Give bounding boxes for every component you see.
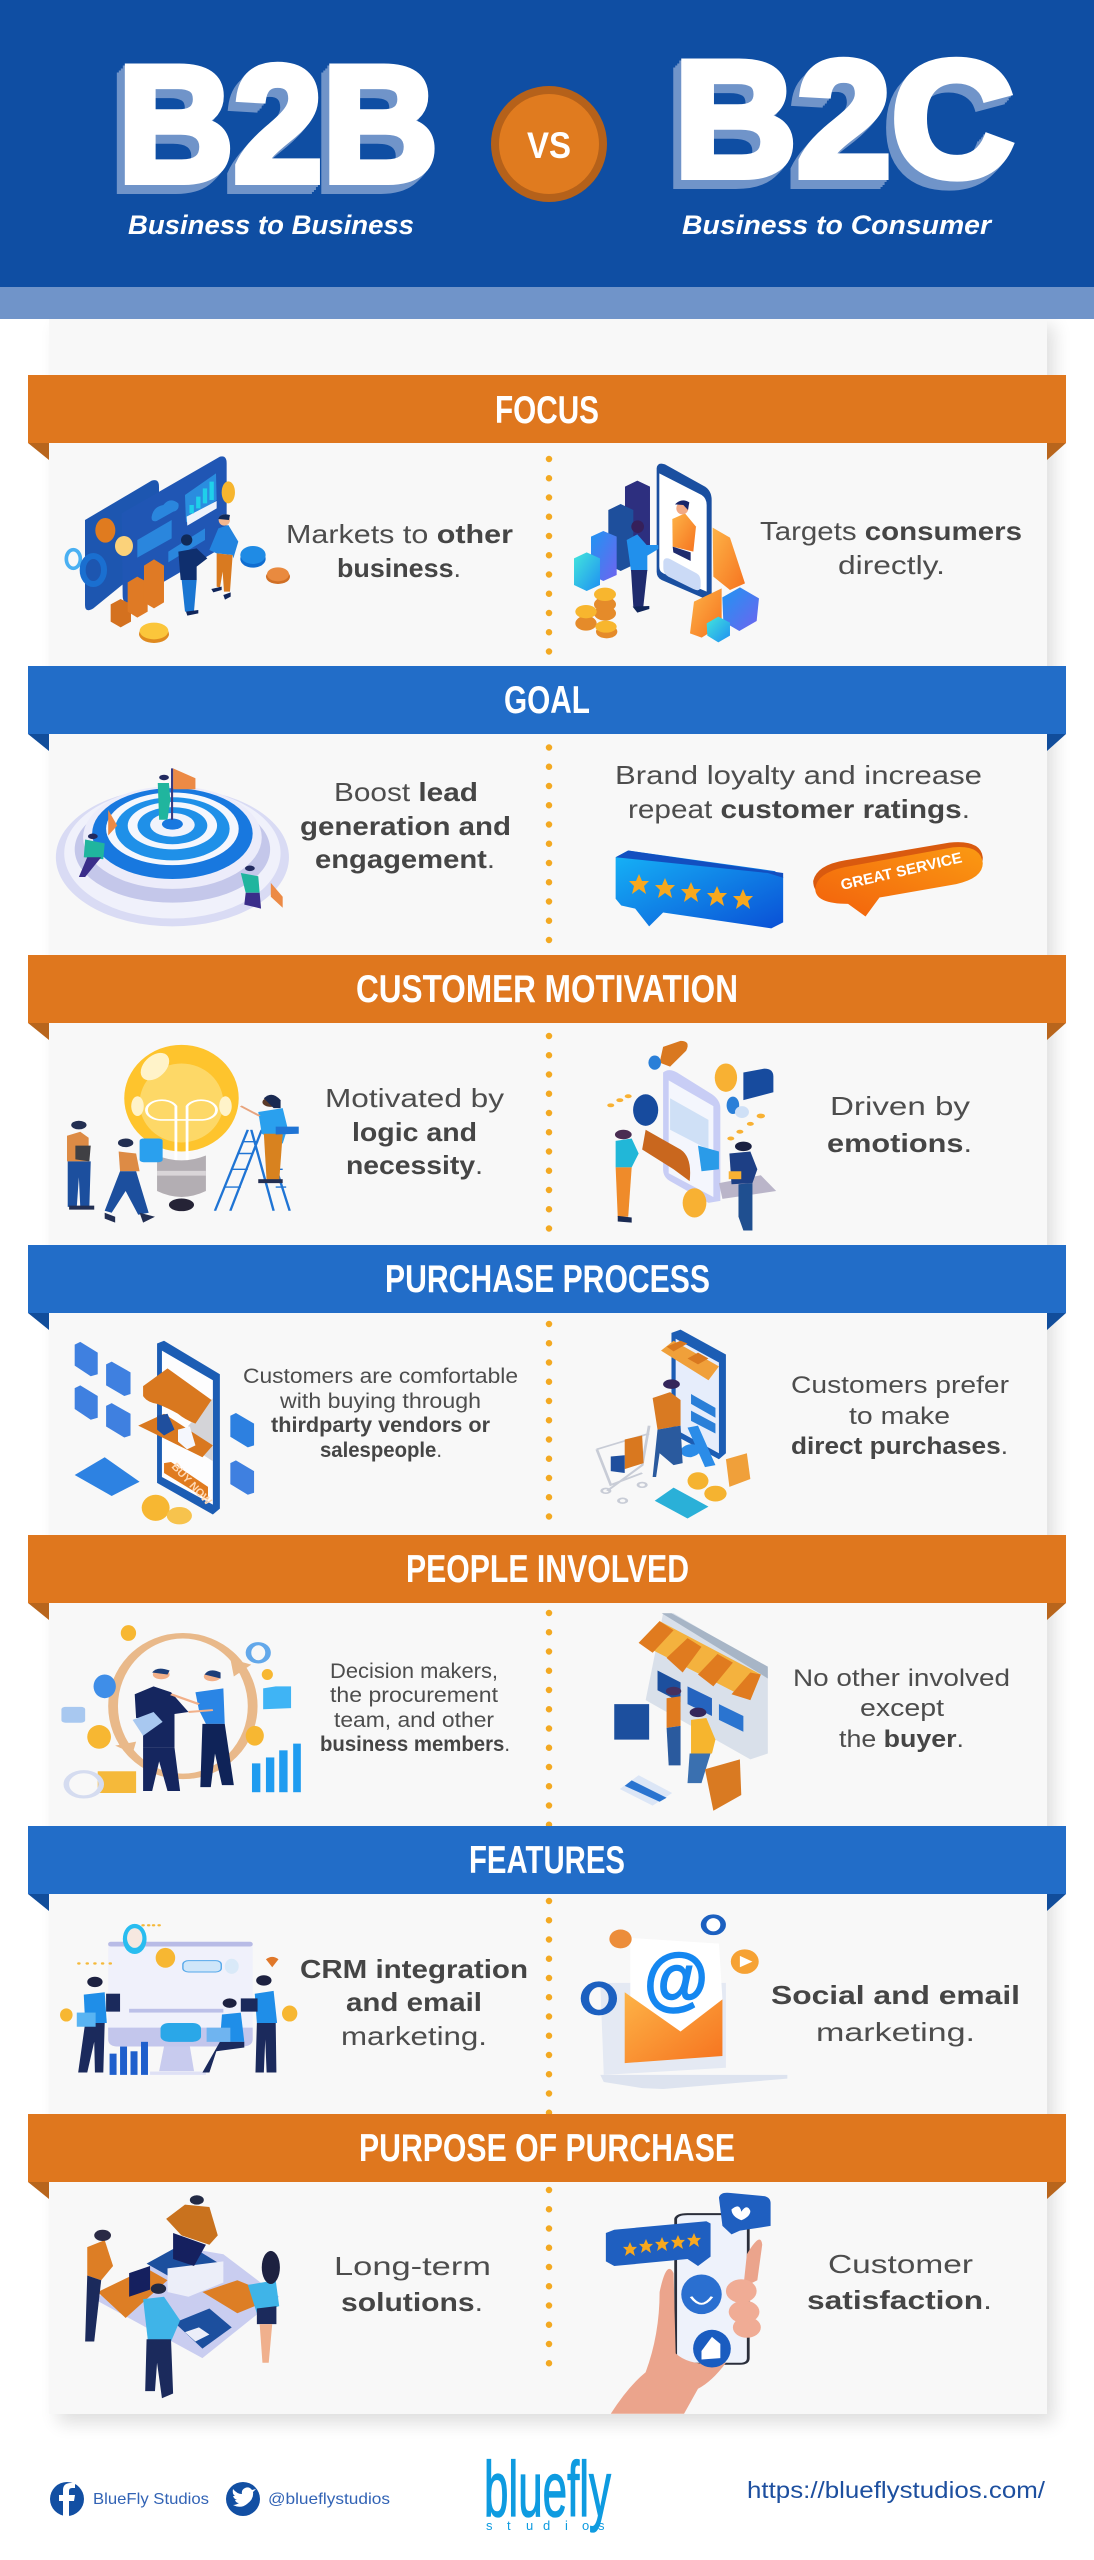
vs badge: VS xyxy=(527,125,571,166)
illustration: storefront buyers xyxy=(614,1613,768,1811)
footer: twitter icon xyxy=(226,2482,260,2516)
banner: CUSTOMER MOTIVATION: CUSTOMER MOTIVATION xyxy=(356,968,738,1011)
illustration: target with people xyxy=(56,768,289,926)
text: motivation B2B: necessity . xyxy=(346,1150,483,1180)
illustration: shopper with cart xyxy=(597,1330,750,1518)
logo: bluefly studios: studios xyxy=(486,2518,605,2533)
icon: rating stars xyxy=(629,874,753,909)
text: goal B2B: engagement . xyxy=(315,844,495,874)
illustration: phone with emotions xyxy=(607,1041,776,1231)
text: purchase B2C xyxy=(791,1372,1009,1460)
text: purchase B2C: direct purchases . xyxy=(791,1433,1008,1460)
icon: at sign: @ xyxy=(644,1939,708,2017)
text: people B2B: Decision makers, xyxy=(330,1660,498,1683)
text: goal B2B: generation and xyxy=(300,811,511,841)
text: motivation B2B: logic and xyxy=(352,1117,477,1147)
footer: twitter handle: @blueflystudios xyxy=(268,2491,390,2508)
text: purpose B2B: solutions . xyxy=(341,2287,483,2317)
text: purchase B2C: to make xyxy=(849,1403,950,1430)
footer: website url: https://blueflystudios.com/ xyxy=(747,2477,1046,2503)
icon: five star bubble xyxy=(616,851,783,928)
title: B2C: B2C xyxy=(670,32,1010,216)
illustration: email on laptop xyxy=(585,1916,787,2089)
banner: PURPOSE OF PURCHASE: PURPOSE OF PURCHASE xyxy=(359,2127,735,2170)
text: motivation B2B: Motivated by xyxy=(325,1083,504,1113)
title: B2C: B2C xyxy=(668,34,1008,218)
text: goal B2C: Brand loyalty and increase xyxy=(615,760,982,790)
text: purchase B2B: with buying through xyxy=(279,1390,481,1413)
illustration: team on puzzle xyxy=(85,2195,280,2398)
banner: CUSTOMER MOTIVATION xyxy=(28,955,1066,1040)
text: focus B2B: business. xyxy=(337,553,461,583)
illustration: consumer on phone xyxy=(574,464,759,642)
banner: FEATURES: FEATURES xyxy=(469,1839,625,1882)
title: B2B: B2B xyxy=(110,41,430,225)
banner: PEOPLE INVOLVED xyxy=(28,1535,1066,1620)
text: motivation B2C xyxy=(827,1091,972,1158)
banner: FOCUS: FOCUS xyxy=(495,389,599,432)
text: focus B2C: directly. xyxy=(838,550,945,580)
text: purpose B2C: Customer xyxy=(828,2249,973,2279)
logo: bluefly studios xyxy=(484,2445,611,2533)
title: B2B: B2B xyxy=(112,39,432,223)
vs badge xyxy=(491,86,607,202)
illustration: light bulb team xyxy=(67,1045,299,1223)
text: features B2C: Social and email xyxy=(771,1980,1020,2010)
subtitle: Business to Consumer: Business to Consumer xyxy=(682,210,993,240)
text: features B2B: CRM integration xyxy=(300,1954,528,1984)
illustration: review bubbles xyxy=(616,842,983,928)
text: purchase B2B xyxy=(243,1365,518,1462)
title: B2B: B2B xyxy=(116,34,436,218)
text: motivation B2C: emotions . xyxy=(827,1128,972,1158)
header background xyxy=(0,0,1094,287)
title: B2B: B2B xyxy=(118,32,438,216)
banner: GOAL xyxy=(28,666,1066,751)
subtitle: Business to Business: Business to Business xyxy=(128,210,414,240)
text: features B2B xyxy=(300,1954,528,2051)
text: focus B2B: Markets to other xyxy=(286,519,513,549)
banner: GOAL: GOAL xyxy=(504,679,590,722)
text: goal B2C: repeat customer ratings . xyxy=(628,794,970,824)
title: B2C: B2C xyxy=(666,36,1006,220)
text: purpose B2C: satisfaction . xyxy=(807,2285,992,2315)
text: focus B2C xyxy=(760,516,1022,580)
text: motivation B2C: Driven by xyxy=(830,1091,970,1121)
banner: PEOPLE INVOLVED: PEOPLE INVOLVED xyxy=(406,1548,689,1591)
icon: great service bubble xyxy=(813,842,983,916)
footer: facebook name: BlueFly Studios xyxy=(93,2491,209,2508)
text: goal B2B: Boost lead xyxy=(334,777,478,807)
illustration: CRM team and monitor xyxy=(60,1924,297,2075)
content panel shadow xyxy=(58,325,1054,2423)
button text: buy now: BUY NOW xyxy=(169,1461,214,1508)
text: purchase B2B: Customers are comfortable xyxy=(243,1365,518,1388)
title: B2C: B2C xyxy=(672,29,1012,213)
text: purpose B2B: Long-term xyxy=(334,2251,491,2281)
banner: FEATURES xyxy=(28,1826,1066,1911)
divider dots xyxy=(546,459,552,2366)
text: people B2C: except xyxy=(860,1695,944,1722)
text: purchase B2C: Customers prefer xyxy=(791,1372,1009,1399)
text: purchase B2B: salespeople. xyxy=(320,1439,442,1462)
banner: PURPOSE OF PURCHASE xyxy=(28,2114,1066,2199)
text: people B2C xyxy=(793,1665,1010,1753)
text: people B2B: team, and other xyxy=(334,1709,494,1732)
content panel xyxy=(49,319,1047,2414)
illustration: hand holding phone xyxy=(606,2193,771,2414)
text: people B2B: business members. xyxy=(320,1733,510,1756)
banner: PURCHASE PROCESS xyxy=(28,1245,1066,1330)
text: purchase B2B: thirdparty vendors or xyxy=(271,1414,490,1437)
illustration: business handshake cycle xyxy=(61,1625,301,1797)
text: features B2C: marketing. xyxy=(816,2017,975,2047)
illustration: dashboards and handshake xyxy=(66,456,290,643)
footer: facebook icon xyxy=(50,2482,84,2516)
text: focus B2C: Targets consumers xyxy=(760,516,1022,546)
bubble text: GREAT SERVICE xyxy=(839,849,964,894)
text: focus B2B xyxy=(286,519,513,583)
text: people B2B: the procurement xyxy=(330,1684,498,1707)
icon: purpose rating stars xyxy=(623,2233,701,2256)
illustration: mobile shop xyxy=(75,1341,254,1524)
banner: PURCHASE PROCESS: PURCHASE PROCESS xyxy=(385,1258,710,1301)
text: purpose B2C xyxy=(807,2249,992,2315)
text: goal B2B xyxy=(300,777,511,874)
banner: FOCUS xyxy=(28,375,1066,460)
title: B2C: B2C xyxy=(674,27,1014,211)
text: people B2C: No other involved xyxy=(793,1665,1010,1692)
text: people B2B xyxy=(320,1660,510,1756)
text: features B2C xyxy=(771,1980,1020,2047)
logo: bluefly studios: bluefly xyxy=(484,2445,611,2533)
title: B2B: B2B xyxy=(114,37,434,221)
header light band xyxy=(0,287,1094,319)
text: features B2B: marketing. xyxy=(341,2021,487,2051)
text: goal B2C xyxy=(615,760,982,824)
text: purpose B2B xyxy=(334,2251,491,2317)
text: features B2B: and email xyxy=(346,1987,482,2017)
text: motivation B2B xyxy=(325,1083,504,1180)
text: people B2C: the buyer . xyxy=(839,1726,964,1753)
